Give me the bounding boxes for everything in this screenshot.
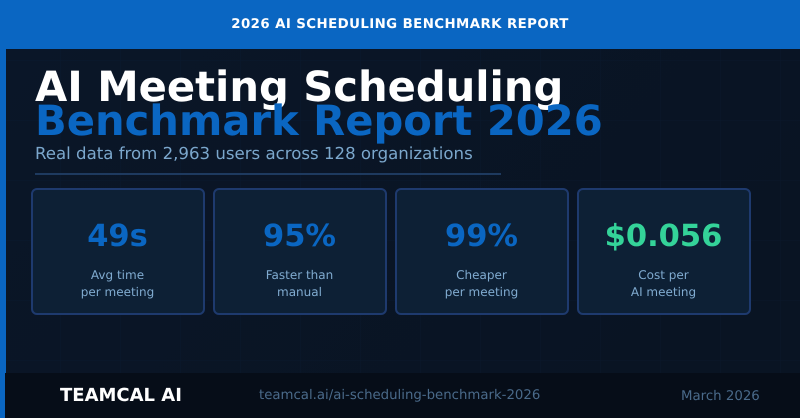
value: 49s	[87, 218, 148, 254]
value: $0.056	[605, 218, 722, 254]
left accent bar	[0, 0, 6, 418]
label: Cost per	[638, 268, 689, 282]
stat card: average time	[30, 188, 204, 314]
label: per meeting	[445, 284, 518, 298]
value: 99%	[445, 218, 518, 254]
label: AI meeting	[631, 284, 696, 298]
divider	[35, 173, 501, 175]
label: Avg time	[91, 268, 144, 282]
stat card: cost	[576, 188, 750, 314]
title line 2: Benchmark Report 2026	[35, 96, 603, 145]
brand: TEAMCAL AI	[60, 385, 182, 406]
footer bar	[5, 373, 800, 418]
stat card: cheaper	[394, 188, 568, 314]
date: March 2026	[681, 389, 760, 404]
label	[445, 268, 518, 298]
label	[631, 268, 696, 298]
label: Cheaper	[456, 268, 507, 282]
label: manual	[277, 284, 322, 298]
url: teamcal.ai/ai-scheduling-benchmark-2026	[259, 388, 540, 403]
value: 95%	[263, 218, 336, 254]
header text: 2026 AI SCHEDULING BENCHMARK REPORT	[231, 17, 569, 32]
subtitle: Real data from 2,963 users across 128 organizations	[35, 144, 473, 163]
header bar	[0, 0, 800, 49]
label: Faster than	[266, 268, 333, 282]
label	[266, 268, 333, 298]
title line 1: AI Meeting Scheduling	[35, 62, 563, 111]
stat card: faster	[212, 188, 386, 314]
label	[81, 268, 154, 298]
label: per meeting	[81, 284, 154, 298]
